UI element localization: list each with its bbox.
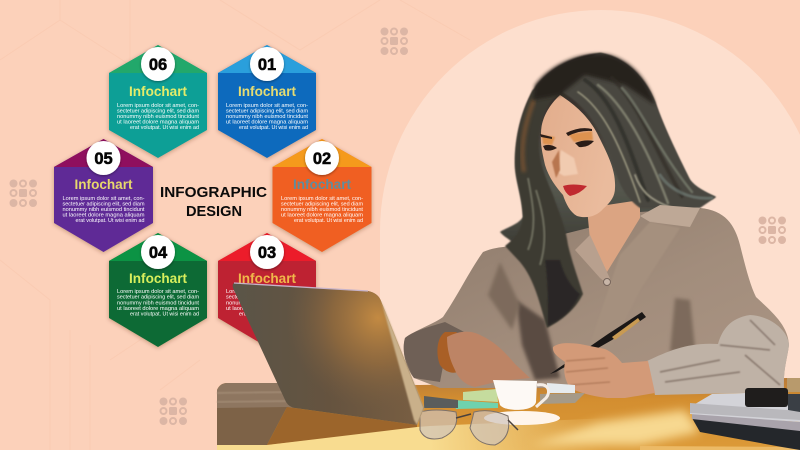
nose xyxy=(557,150,578,176)
hair back xyxy=(500,53,716,260)
hexagon 01: erat volutpat. Ut wisi enim ad xyxy=(239,125,308,131)
desk items xyxy=(420,380,800,450)
shirt shadows xyxy=(404,322,470,382)
neck xyxy=(587,200,640,272)
icon: dot grid left xyxy=(10,180,37,207)
hexagon 05 xyxy=(54,139,153,252)
right hand and forearm xyxy=(553,343,655,398)
hexagon 04: nonummy nibh euismod tincidunt xyxy=(117,300,199,306)
hexagon 04: Lorem ipsum dolor sit amet, con- xyxy=(117,289,199,295)
hexagon 01 xyxy=(218,45,316,158)
notes xyxy=(547,383,575,393)
hair right side xyxy=(562,53,716,208)
collar xyxy=(640,205,700,227)
laptop xyxy=(233,283,458,425)
hexagon 05: nonummy nibh euismod tincidunt xyxy=(62,207,145,213)
hexagon 02: ut laoreet dolore magna aliquam xyxy=(281,213,363,219)
glasses xyxy=(420,410,509,445)
icon: dot grid right xyxy=(758,216,786,244)
bracelet xyxy=(437,332,458,373)
hexagon 06: ut laoreet dolore magna aliquam xyxy=(117,120,199,126)
hexagon 04 xyxy=(109,233,207,347)
hexagon 05: Infochart xyxy=(74,176,133,192)
hexagon 03: sectetuer adipiscing elit, sed diam xyxy=(226,295,308,301)
hexagon 06: Infochart xyxy=(129,83,187,99)
hexagon 02: Infochart xyxy=(293,176,351,192)
left hand xyxy=(447,332,530,387)
hexagon 06: Lorem ipsum dolor sit amet, con- xyxy=(117,103,199,109)
hexagon 02: 02 xyxy=(313,150,331,168)
hexagon 03: Infochart xyxy=(238,270,296,286)
hexagon 01: ut laoreet dolore magna aliquam xyxy=(226,120,308,126)
hexagon 03: nonummy nibh euismod tincidunt xyxy=(226,300,308,306)
hexagon 02: Lorem ipsum dolor sit amet, con- xyxy=(281,196,363,202)
hexagon 03: erat volutpat. Ut wisi enim ad xyxy=(239,312,308,318)
hexagon 05: Lorem ipsum dolor sit amet, con- xyxy=(62,196,145,202)
hexagon 01: Infochart xyxy=(238,83,296,99)
hexagon 02: erat volutpat. Ut wisi enim ad xyxy=(294,218,363,224)
hexagon 04: erat volutpat. Ut wisi enim ad xyxy=(130,312,199,318)
icon: dot grid bottom xyxy=(160,398,187,425)
hexagon 03: Lorem ipsum dolor sit amet, con- xyxy=(226,289,308,295)
hexagon 01: nonummy nibh euismod tincidunt xyxy=(226,114,308,120)
hexagon 01: 01 xyxy=(258,56,276,74)
table xyxy=(217,378,800,450)
pen xyxy=(550,312,646,374)
hair left side xyxy=(505,90,583,328)
icon: dot grid top xyxy=(380,28,408,55)
hexagon 06: sectetuer adipiscing elit, sed diam xyxy=(117,108,199,114)
spiral notebook xyxy=(540,393,585,404)
face xyxy=(541,95,615,217)
hexagon 01: sectetuer adipiscing elit, sed diam xyxy=(226,108,308,114)
hexagon 03: ut laoreet dolore magna aliquam xyxy=(226,306,308,312)
hexagon 03 xyxy=(218,233,316,347)
eye shadow xyxy=(542,131,593,145)
hexagon 06: nonummy nibh euismod tincidunt xyxy=(117,114,199,120)
hexagon 06 xyxy=(109,45,207,158)
hexagon 01: Lorem ipsum dolor sit amet, con- xyxy=(226,103,308,109)
stacked notebooks xyxy=(692,418,800,450)
hexagon 02 xyxy=(272,139,372,252)
person xyxy=(404,53,789,398)
brows and eyes xyxy=(540,128,594,151)
hexagon 02: nonummy nibh euismod tincidunt xyxy=(281,207,363,213)
coffee cup xyxy=(493,380,537,410)
hexagon 04: ut laoreet dolore magna aliquam xyxy=(117,306,199,312)
lips xyxy=(563,184,587,196)
hexagon 04: sectetuer adipiscing elit, sed diam xyxy=(117,295,199,301)
title xyxy=(160,184,267,220)
hexagon 02: sectetuer adipiscing elit, sed diam xyxy=(281,202,363,208)
hexagon 04: Infochart xyxy=(129,270,187,286)
shirt xyxy=(404,208,789,388)
title: INFOGRAPHIC xyxy=(160,184,267,201)
hexagon 04: 04 xyxy=(149,244,168,262)
shirt button xyxy=(604,278,610,286)
black clip xyxy=(745,388,788,407)
light circular backdrop xyxy=(380,10,800,450)
sleeve cuff xyxy=(647,315,789,395)
hexagon 03: 03 xyxy=(258,244,276,262)
hexagon 05: 05 xyxy=(94,150,113,168)
saucer xyxy=(484,411,560,425)
title: DESIGN xyxy=(186,203,242,220)
hexagon 05: erat volutpat. Ut wisi enim ad xyxy=(76,218,144,224)
hexagon 05: sectetuer adipiscing elit, sed diam xyxy=(62,202,145,208)
hexagon 06: 06 xyxy=(149,56,167,74)
hexagon 05: ut laoreet dolore magna aliquam xyxy=(62,213,145,219)
hexagon 06: erat volutpat. Ut wisi enim ad xyxy=(130,125,199,131)
